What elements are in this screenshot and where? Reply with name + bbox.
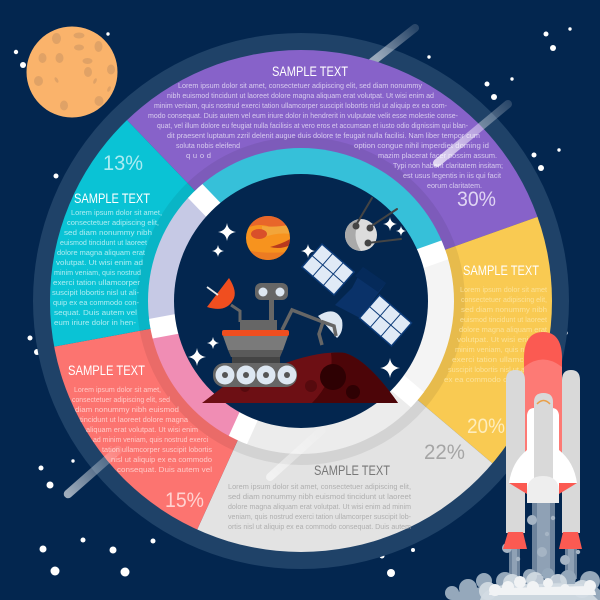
heading and text: purple: minim veniam, quis nostrud exerci tation ullamcorper suscipit lobortis nisl ut aliquip ex ea com- [154,101,447,110]
heading and text: gray: sed diam nonummy nibh euismod tincidunt ut laoreet [228,492,412,501]
heading and text: red: Lorem ipsum dolor sit amet, [74,385,161,394]
heading and text: teal: eum iriure dolor in hen- [54,318,136,327]
rover arm [282,310,323,330]
heading and text: red: tincidunt ut laoreet dolore magna [80,415,189,424]
heading and text: purple: quat, vel illum dolore eu feugiat nulla facilisis at vero eros et accumsan et iusto odio dignissim qui blan- [157,121,468,130]
heading and text: yellow: suscipit lobortis nisl ut aliquip [448,365,542,374]
percentage: 30%: 30% [457,188,496,211]
heading and text: teal: dolore magna aliquam erat [57,248,146,257]
sector: teal 13% [50,120,195,347]
icon: rocket [503,332,582,549]
comet: gray sector [270,430,322,477]
heading and text: gray: veniam, quis nostrud exerci tation ullamcorper suscipit lob- [228,512,411,521]
icon: sputnik [345,198,401,251]
heading and text: purple: modo consequat. Duis autem vel eum iriure dolor in hendrerit in vulputate velit esse molestie conse- [148,111,458,120]
icon: satellite [301,243,413,347]
heading and text: yellow: ex ea commodo consequat [444,375,541,384]
heading and text: yellow: sed diam nonummy nibh [461,305,547,314]
heading and text: gray: SAMPLE TEXT [314,463,390,478]
central sparkle stars [188,217,406,378]
heading and text: teal: volutpat. Ut wisi enim ad [56,258,143,267]
heading and text: teal: suscipit lobortis nisl ut ali- [52,288,139,297]
solar panel [358,294,413,347]
heading and text: red: aliquam erat volutpat. Ut wisi enim [86,425,198,434]
outer ring [33,33,569,569]
exhaust and smoke [445,503,600,600]
percentage: 20%: 20% [467,415,505,438]
heading and text: teal [52,191,162,327]
inner shadow ring [143,143,459,459]
heading and text: purple: Lorem ipsum dolor sit amet, consectetuer adipiscing elit, sed diam nonummy [178,81,422,90]
rocket boosters [506,370,525,533]
heading and text: red [68,363,212,474]
inner colour ring [148,148,454,454]
hill with craters [202,352,398,403]
heading and text: yellow: SAMPLE TEXT [463,263,539,278]
heading and text: teal: sequat. Duis autem vel [54,308,137,317]
percentage: 22%: 22% [424,441,465,464]
heading and text: purple: q u o d [186,151,211,160]
heading and text: gray [228,463,412,531]
heading and text: purple: est usus legentis in iis qui facit [403,171,502,180]
heading and text: teal: minim veniam, quis nostrud [54,268,141,277]
heading and text: yellow: minim veniam, quis nostrud [455,345,545,354]
rocket fuel tank [524,332,562,455]
icon: Jupiter planet [246,216,290,260]
icon: rover [207,278,342,387]
heading and text: teal: sed diam nonummy nibh [64,228,152,237]
center tank [534,393,553,480]
orbiter wings [509,483,527,494]
heading and text: red: ad minim veniam, quis nostrud exerci [93,435,208,444]
heading and text: red: nisl ut aliquip ex ea commodo [111,455,212,464]
heading and text: purple: option congue nihil imperdiet doming id [354,141,489,150]
comet: lower left [68,450,118,494]
heading and text: purple: SAMPLE TEXT [272,64,348,79]
percentage: 13%: 13% [103,152,143,175]
heading and text: teal: consectetuer adipiscing elit, [67,218,159,227]
heading and text: teal: Lorem ipsum dolor sit amet, [71,208,162,217]
central dark circle [174,174,428,428]
heading and text: purple: Typi non habent claritatem insitam; [393,161,503,170]
heading and text: gray: dolore magna aliquam erat volutpat. Ut wisi enim ad minim [228,502,411,511]
heading and text: yellow: consectetuer adipiscing elit, [461,295,547,304]
heading and text: red: consequat. Duis autem vel [117,465,212,474]
satellite body [335,267,386,318]
heading and text: purple: dit praesent luptatum zzril delenit augue duis dolore te feugait nulla facilisi. Nam liber tempor cum [167,131,480,140]
sector: red 15% [54,328,238,530]
heading and text: gray: Lorem ipsum dolor sit amet, consectetuer adipiscing elit, [228,482,411,491]
heading and text: yellow [444,263,548,384]
heading and text: teal: euismod tincidunt ut laoreet [60,238,148,247]
engine dome [527,476,559,503]
rover body [222,330,289,336]
heading and text: gray: ortis nisl ut aliquip ex ea commodo consequat. Duis autem [228,522,411,531]
comet: top [372,28,415,62]
heading and text: red: diam nonummy nibh euismod [75,405,179,414]
heading and text: yellow: dolore magna aliquam erat [459,325,548,334]
pie chart sectors [50,50,552,552]
heading and text: purple: nibh euismod tincidunt ut laoreet dolore magna aliquam erat volutpat. Ut wisi enim ad [167,91,434,100]
heading and text: yellow: volutpat. Ut wisi enim ad [457,335,547,344]
heading and text: purple: soluta nobis eleifend [176,141,240,150]
comet: right [437,104,508,163]
heading and text: yellow: euismod tincidunt ut laoreet [460,315,548,324]
heading and text: purple [148,64,503,190]
heading and text: teal: quip ex ea commodo con- [53,298,139,307]
heading and text: purple: eorum claritatem. [427,181,482,190]
sector: purple 30% [127,50,538,250]
rover tracks [213,363,297,387]
rover dish [207,278,235,309]
heading and text: purple: mazim placerat facer possim assum. [378,151,497,160]
rover head [255,283,288,300]
heading and text: teal: SAMPLE TEXT [74,191,150,206]
planet: orange moon [26,26,118,118]
heading and text: red: SAMPLE TEXT [68,363,145,378]
heading and text: teal: exerci tation ullamcorper [53,278,140,287]
percentage: 15%: 15% [165,489,204,512]
solar panel [301,243,355,296]
sector: yellow 20% [418,216,552,464]
heading and text: yellow: Lorem ipsum dolor sit amet [460,285,548,294]
heading and text: red: consectetuer adipiscing elit, sed [72,395,170,404]
heading and text: yellow: exerci tation ullamcorper [452,355,544,364]
sector: gray 22% [197,400,492,552]
heading and text: red: tation ullamcorper suscipit lobortis [102,445,212,454]
